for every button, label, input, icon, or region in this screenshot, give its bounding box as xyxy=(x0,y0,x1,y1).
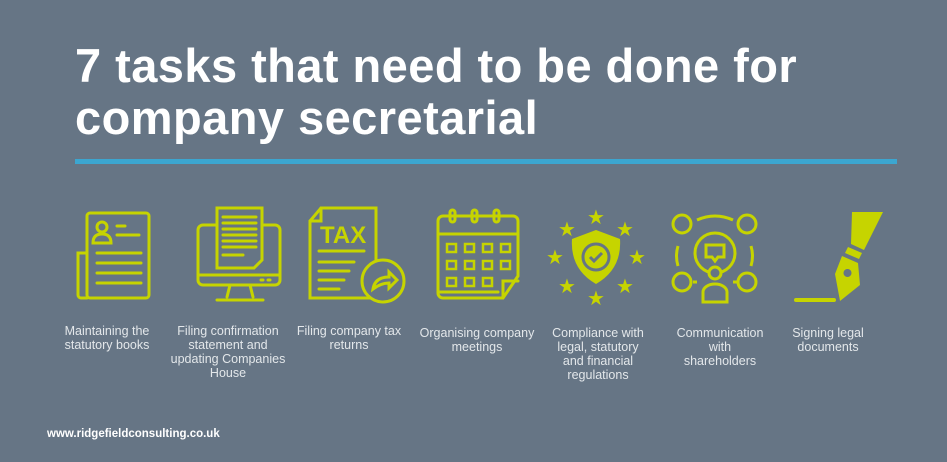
icon: tax return: TAX xyxy=(320,222,366,249)
labels: Maintaining the statutory books xyxy=(65,324,149,352)
icon: tax return xyxy=(308,206,406,304)
icon: compliance shield: ★ xyxy=(546,245,564,269)
icon: compliance shield: ★ xyxy=(616,217,634,241)
text: Communication with shareholders xyxy=(677,326,763,368)
text: Filing confirmation statement and updating Companies House xyxy=(171,324,285,380)
text: Compliance with legal, statutory and financial regulations xyxy=(552,326,644,382)
icon: compliance shield: ★ xyxy=(558,217,576,241)
title: 7 tasks that need to be done for xyxy=(75,39,797,92)
title xyxy=(75,39,797,144)
icon: compliance shield xyxy=(546,208,646,306)
icon: computer filing xyxy=(196,206,282,302)
icon: compliance shield: ★ xyxy=(628,245,646,269)
text: Filing company tax returns xyxy=(297,324,401,352)
icon: shareholders xyxy=(672,214,758,304)
website url: www.ridgefieldconsulting.co.uk xyxy=(47,428,220,440)
title: company secretarial xyxy=(75,91,538,144)
icon: compliance shield: ★ xyxy=(616,274,634,298)
icon: statutory books xyxy=(76,212,150,300)
text: Signing legal documents xyxy=(792,326,864,354)
icon: calendar xyxy=(436,208,520,300)
icon: compliance shield: ★ xyxy=(558,274,576,298)
text: Organising company meetings xyxy=(420,326,534,354)
icon: pen xyxy=(794,212,883,302)
